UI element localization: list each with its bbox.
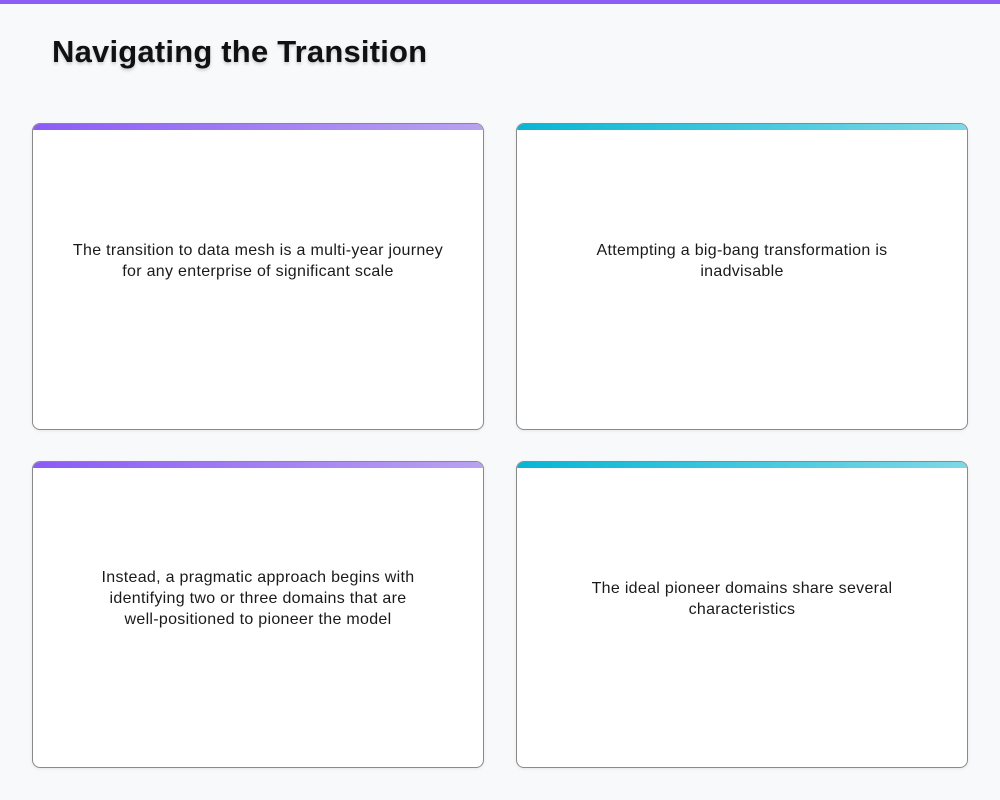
panel: pragmatic approach [32,461,484,768]
panel: pioneer domains: The ideal pioneer domains share several [592,580,892,596]
panel: big-bang inadvisable: inadvisable [700,262,784,280]
panel: big-bang inadvisable: Attempting a big-bang transformation is [597,242,887,258]
panel: pioneer domains [516,461,968,768]
panel: multi-year journey: The transition to data mesh is a multi-year journey [73,242,443,258]
panel: pragmatic approach: identifying two or three domains that are [110,590,406,607]
panel: pragmatic approach: Instead, a pragmatic approach begins with [102,569,414,586]
panel: multi-year journey: for any enterprise of significant scale [122,262,394,280]
panel: big-bang inadvisable [516,123,968,430]
title: Navigating the Transition [52,34,427,69]
panel: multi-year journey [32,123,484,430]
panel: pragmatic approach: well-positioned to pioneer the model [125,611,391,628]
panel: pioneer domains: characteristics [689,600,795,618]
